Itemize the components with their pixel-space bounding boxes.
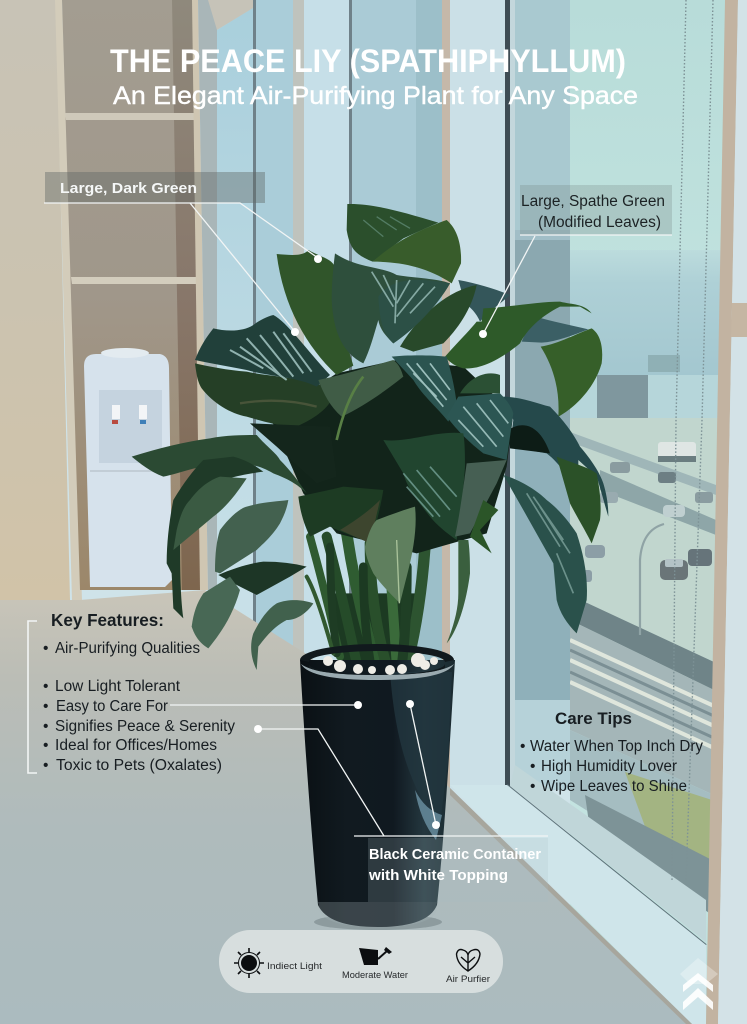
leaf: right tall narrow <box>447 540 470 643</box>
label: spathe green <box>521 193 665 231</box>
glass base reflection <box>510 765 706 942</box>
callout box: spathe green <box>520 185 672 235</box>
care tips list: Wipe Leaves to Shine <box>541 778 687 795</box>
care tips list: • <box>530 758 535 775</box>
label: black ceramic container <box>368 846 541 884</box>
label: black ceramic container: Black Ceramic Container <box>369 846 541 863</box>
leaf: front pale center <box>318 360 403 417</box>
carpet floor <box>0 590 692 1024</box>
leaf: shiny center right <box>392 355 457 422</box>
key features list: • <box>43 718 48 735</box>
care tips list: High Humidity Lover <box>541 758 677 775</box>
building reflected in glass <box>515 0 570 790</box>
callout dots <box>254 255 487 829</box>
key features list: • <box>43 757 48 774</box>
leaf: small green right <box>470 500 498 553</box>
leaf: left arching dark <box>167 457 263 618</box>
text: air purifier: Air Purfier <box>446 974 490 985</box>
stem backing <box>327 593 420 667</box>
leaf: lower left small <box>192 577 240 648</box>
label: black ceramic container: with White Topping <box>368 867 508 884</box>
key features list: Easy to Care For <box>56 698 168 715</box>
key features list: Toxic to Pets (Oxalates) <box>56 757 222 774</box>
pot shadow <box>314 914 442 930</box>
leaf: center crown <box>332 253 450 363</box>
stems <box>307 517 427 667</box>
key features list: Air-Purifying Qualities <box>55 640 200 657</box>
leaf: top front <box>373 220 461 283</box>
key features list: Ideal for Offices/Homes <box>55 737 217 754</box>
leaf: shiny far center <box>447 393 513 460</box>
care tips list: • <box>520 738 525 755</box>
key features heading: Key Features: <box>51 610 164 630</box>
vehicles <box>580 442 713 582</box>
logo: chevrons <box>680 958 718 1010</box>
leaf: center lower veined <box>383 433 465 540</box>
text: moderate water: Moderate Water <box>342 970 408 981</box>
street lamp <box>640 524 664 635</box>
window sill <box>450 785 706 1024</box>
water cooler <box>84 348 172 587</box>
icon: sun <box>234 948 264 978</box>
care tips panel <box>520 710 703 795</box>
key features list <box>43 640 235 774</box>
leaf: dark left behind <box>250 423 337 483</box>
icon: watering can <box>359 947 392 965</box>
care tips heading: Care Tips <box>555 710 632 728</box>
key features list: Signifies Peace & Serenity <box>55 718 235 735</box>
key features panel <box>43 610 235 774</box>
plant core shadow <box>270 360 513 553</box>
care tips list: Water When Top Inch Dry <box>530 738 703 755</box>
leaf: dark arch <box>218 562 307 595</box>
right pillar <box>706 0 738 1024</box>
leaf: left horizontal <box>132 435 307 493</box>
leaf: dark front <box>298 487 383 543</box>
leaf: upper left big <box>277 250 353 375</box>
leaf: right drooping shiny <box>503 397 608 517</box>
black ceramic pot <box>300 644 455 927</box>
leaf: lower right <box>557 457 601 543</box>
callout box: container <box>368 838 548 902</box>
care tips list <box>520 738 703 795</box>
icon: heart leaf <box>456 950 480 971</box>
leaf: gray-green right <box>455 460 507 537</box>
leaf: lower left curled <box>251 600 313 670</box>
subtitle: An Elegant Air-Purifying Plant for Any Space <box>113 82 638 110</box>
label: spathe green: Large, Spathe Green <box>521 193 665 210</box>
plant <box>132 204 608 670</box>
leaf: pale spathe front <box>365 507 416 603</box>
key features list: Low Light Tolerant <box>55 678 181 695</box>
key features list: • <box>43 640 48 657</box>
leaf: top back <box>347 204 438 262</box>
key features list: • <box>43 737 48 754</box>
highway <box>570 418 718 700</box>
leaf: right broad <box>445 302 592 369</box>
leaf: upper right dark <box>458 280 510 322</box>
label: spathe green: (Modified Leaves) <box>538 214 661 231</box>
key features list: • <box>43 678 48 695</box>
text: indirect light: Indiect Light <box>267 961 322 972</box>
leaf: left lower broad <box>215 500 288 573</box>
leaf: long right drooping <box>503 475 587 633</box>
leaf: far right <box>541 328 602 417</box>
leaf: left gray <box>173 477 247 550</box>
distant city haze <box>570 250 725 385</box>
callout box: large dark green <box>45 172 265 203</box>
leaf: far right shiny <box>522 317 588 343</box>
key features list: • <box>43 698 48 715</box>
care icons pill <box>219 930 503 993</box>
blind cords <box>672 0 713 880</box>
title: THE PEACE LIY (SPATHIPHYLLUM) <box>110 43 626 79</box>
leaf: center right <box>400 285 477 352</box>
leaf: left broad shiny <box>195 315 330 387</box>
leaf: left broad lower <box>195 363 332 427</box>
care tips list: • <box>530 778 535 795</box>
label: large dark green: Large, Dark Green <box>60 180 197 197</box>
leaf: small behind right <box>460 373 500 393</box>
leader lines <box>28 203 672 836</box>
